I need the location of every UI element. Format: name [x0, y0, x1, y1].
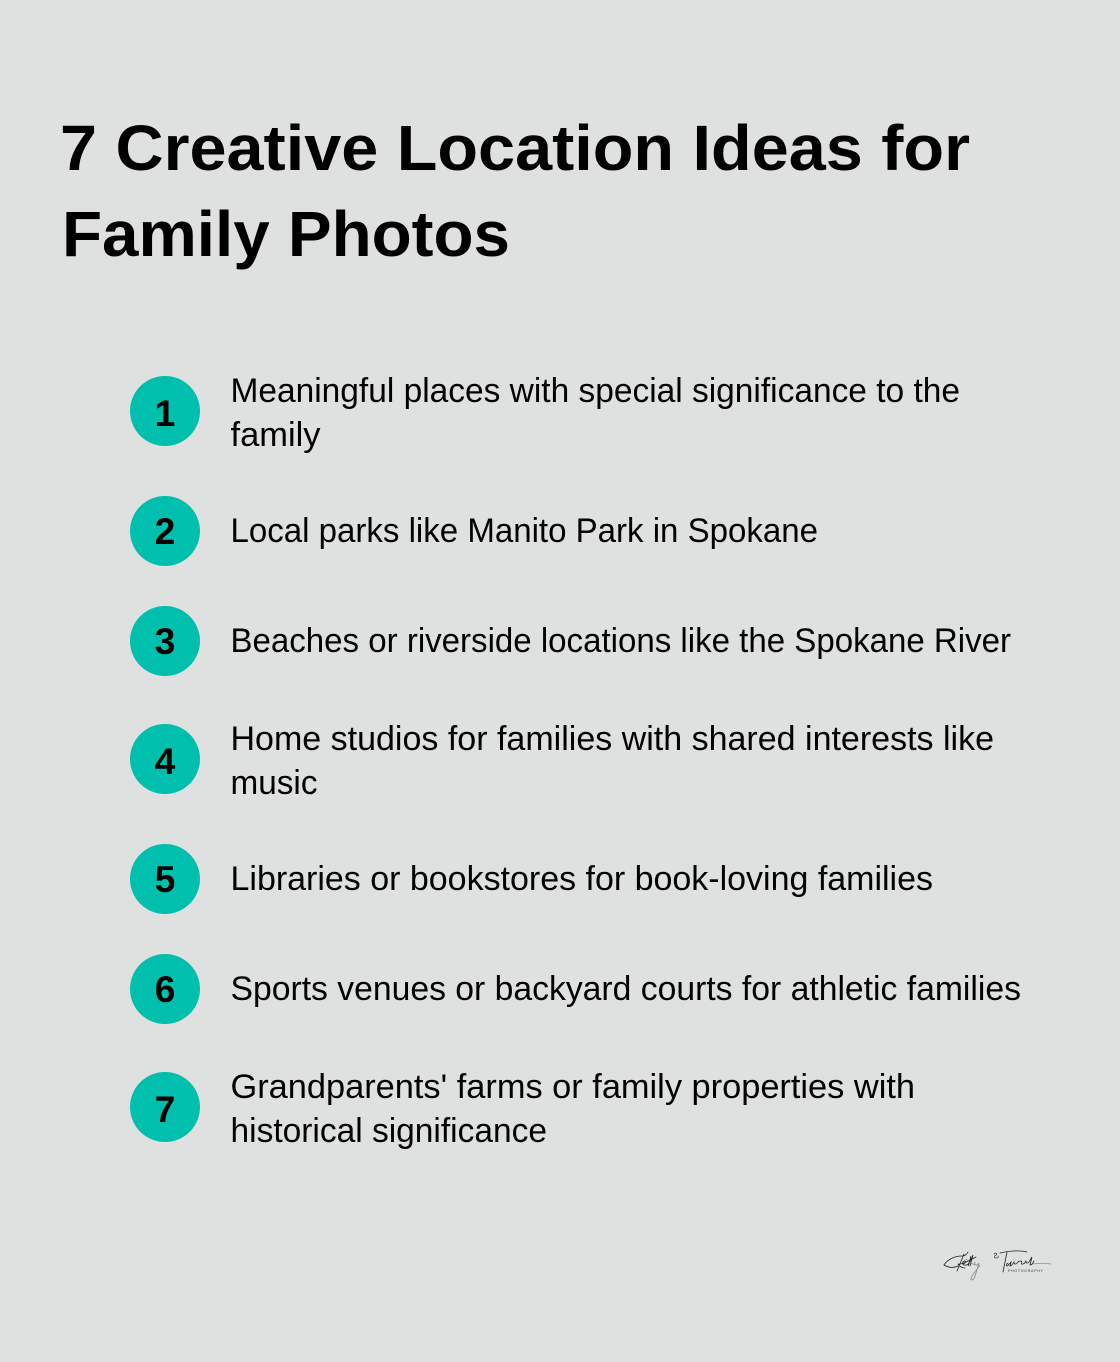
item 2	[130, 496, 818, 566]
item 3: Beaches or riverside locations like the Spokane River	[230, 622, 1011, 660]
item 6	[130, 954, 1021, 1024]
item 7: 7	[155, 1089, 175, 1130]
signature logo	[944, 1251, 1051, 1280]
list of location ideas	[130, 372, 1021, 1150]
item 2: 2	[155, 511, 175, 552]
item 5	[130, 844, 933, 914]
title	[60, 112, 970, 270]
item 2: Local parks like Manito Park in Spokane	[230, 512, 818, 550]
item 1: 1	[155, 393, 175, 434]
item 5: 5	[155, 859, 175, 900]
item 4: 4	[155, 741, 176, 782]
item 3: 3	[155, 621, 175, 662]
item 1: family	[230, 416, 320, 454]
item 4: Home studios for families with shared interests like	[230, 720, 994, 758]
item 4	[130, 720, 994, 802]
title: 7 Creative Location Ideas for	[60, 112, 970, 184]
item 7: Grandparents' farms or family properties with	[230, 1068, 915, 1106]
item 4: music	[230, 764, 318, 802]
item 3	[130, 606, 1011, 676]
item 7	[130, 1068, 915, 1150]
title: Family Photos	[62, 198, 510, 270]
item 1: Meaningful places with special significance to the	[230, 372, 960, 410]
signature logo: PHOTOGRAPHY	[1008, 1269, 1044, 1273]
item 7: historical significance	[230, 1112, 547, 1150]
item 6: Sports venues or backyard courts for athletic families	[230, 970, 1021, 1008]
item 5: Libraries or bookstores for book-loving families	[230, 860, 933, 898]
item 6: 6	[155, 969, 175, 1010]
item 1	[130, 372, 960, 454]
